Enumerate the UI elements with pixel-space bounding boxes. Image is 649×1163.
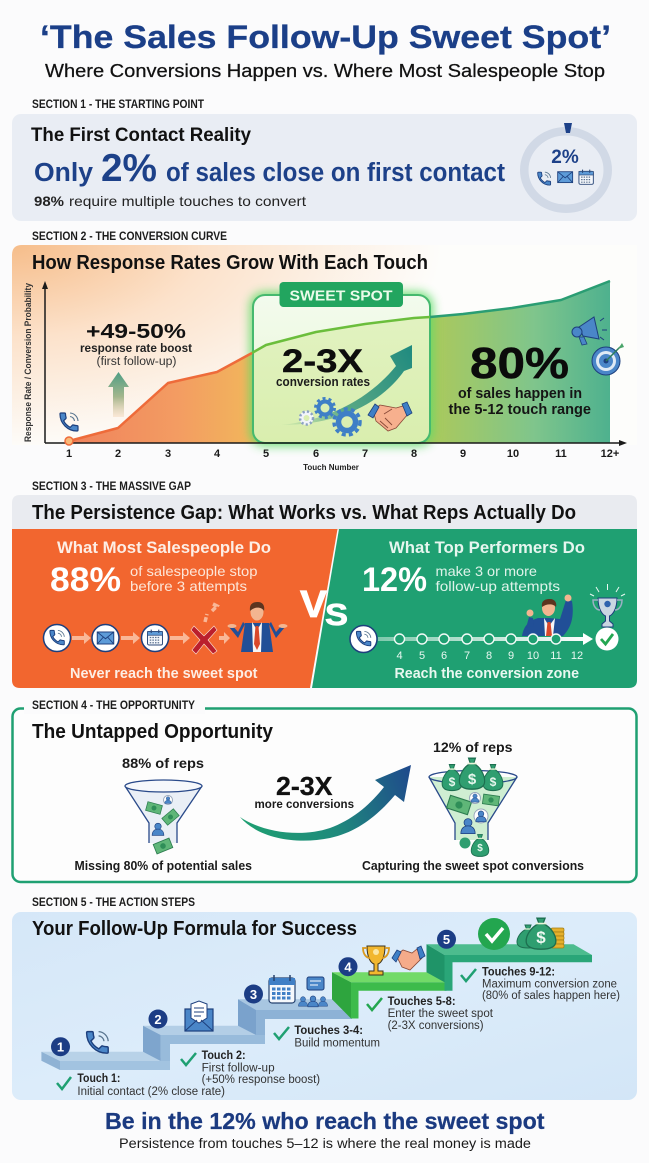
stat: 88 percent: before 3 attempts [130,578,247,594]
x axis title: Touch Number [303,463,359,472]
area chart [69,281,610,443]
callout: first follow-up boost: +49-50% [86,321,186,343]
panel: most salespeople: What Most Salespeople Do [57,539,271,557]
step 2 text: Touch 2: [202,1050,246,1062]
multiplier callout: 2-3X [276,771,333,801]
step 2 text: (+50% response boost) [202,1074,320,1086]
stat: 80 percent [448,339,591,418]
x axis tick labels: 4 [214,448,221,460]
label: 88 percent of reps: 88% of reps [122,755,204,771]
panel heading: The Persistence Gap: What Works vs. What Reps Actually Do [32,502,576,524]
VS badge [300,584,348,632]
icon: calendar [579,170,593,184]
stat: 88 percent: of salespeople stop [130,563,258,579]
panel heading: The First Contact Reality [31,125,251,146]
icon: megaphone [572,317,607,345]
x axis tick labels: 2 [115,448,121,460]
touch timeline: 4 [396,650,403,662]
stat: 80 percent: of sales happen in [458,386,582,402]
panel heading: Your Follow-Up Formula for Success [32,918,357,940]
stat: 12 percent [362,561,560,599]
touch timeline: 6 [441,650,447,662]
touch timeline: 11 [550,650,562,662]
touch timeline: 9 [508,650,514,662]
touch sequence icons [44,604,230,654]
caption: missing: Missing 80% of potential sales [74,859,252,873]
callout: first follow-up boost: (first follow-up) [96,356,177,368]
VS badge: S [325,597,348,632]
icon: money bags and coins [517,918,564,949]
sweet spot stat: conversion rates [276,375,370,389]
step 4 text: (2-3X conversions) [388,1020,484,1032]
icon: phone start [60,413,78,431]
title: ‘The Sales Follow-Up Sweet Spot’ [40,19,611,55]
panel heading: The Untapped Opportunity [32,721,274,743]
stat: 88 percent: 88% [50,561,121,599]
icon: email [185,1001,213,1031]
x axis tick labels: 9 [460,448,466,460]
step 1 text: Initial contact (2% close rate) [77,1086,225,1098]
icon: team chat [298,977,328,1007]
x axis tick labels: 10 [507,448,519,460]
funnel: full [429,758,517,856]
donut: 2 percent [524,123,608,209]
panel: untapped opportunity [12,700,636,882]
step 2 text [181,1050,320,1086]
callout: first follow-up boost [80,321,192,417]
icon: money bags and coins: $ [536,928,546,947]
step 5 text: Maximum conversion zone [482,979,617,991]
icon: success check [478,918,510,950]
sweet spot badge: SWEET SPOT [290,288,392,304]
subtitle: Where Conversions Happen vs. Where Most Salespeople Stop [45,60,605,81]
step 3 text [274,1025,380,1050]
headline statistic: of sales close on first contact [166,159,505,187]
panel: action steps: 5 [443,932,450,947]
touch timeline [350,626,618,662]
panel: top performers [312,529,637,688]
step 5 text: (80% of sales happen here) [482,990,620,1002]
section 2 label: SECTION 2 - THE CONVERSION CURVE [32,231,227,243]
callout: first follow-up boost: response rate boost [80,341,192,355]
icon: phone [87,1032,108,1053]
curve lines [69,281,610,441]
panel: action steps: 4 [344,960,352,974]
icon: money bags: $ [449,775,456,789]
caption: Reach the conversion zone [394,665,579,682]
y axis label: Response Rate / Conversion Probability [23,283,33,442]
panel: action steps: 2 [154,1012,162,1027]
panel: conversion curve [12,245,637,472]
stat: 12 percent: make 3 or more [436,563,537,579]
touch timeline: 8 [486,650,492,662]
headline statistic: Only [34,159,94,187]
donut: 2 percent: 2% [551,147,579,168]
label: 12 percent of reps: 12% of reps [433,739,513,755]
x axis tick labels: 11 [555,448,567,460]
arrow: up [108,372,129,417]
stat: 80 percent: 80% [470,339,569,388]
x axis tick labels: 5 [263,448,269,460]
person: shrugging rep [228,602,288,652]
VS badge: V [300,584,328,626]
panel heading: How Response Rates Grow With Each Touch [32,252,428,274]
step 4 text: Enter the sweet spot [388,1008,494,1020]
stat: 12 percent: follow-up attempts [436,578,560,594]
x axis tick labels: 8 [411,448,417,460]
icon: money bags: $ [468,771,477,788]
axes [42,281,627,446]
touch timeline: 7 [464,650,470,662]
footer headline: Be in the 12% who reach the sweet spot [105,1108,545,1134]
x axis tick labels: 6 [313,448,319,460]
start marker [65,437,73,445]
panel: action steps [12,912,637,1100]
touch timeline: 5 [419,650,425,662]
step 4 text: Touches 5-8: [388,996,456,1008]
section 4 label: SECTION 4 - THE OPPORTUNITY [32,700,195,712]
panel: top performers: What Top Performers Do [389,539,585,557]
x axis tick labels: 12+ [601,448,619,460]
section 1 label: SECTION 1 - THE STARTING POINT [32,99,204,111]
person: celebrating rep [522,594,573,636]
section 5 label: SECTION 5 - THE ACTION STEPS [32,897,195,909]
footer subline: Persistence from touches 5–12 is where the real money is made [119,1136,531,1151]
icon: money bags: $ [490,775,497,789]
step 3 text: Touches 3-4: [294,1025,363,1037]
icon: money bags [442,758,503,791]
x axis tick labels: 1 [66,448,72,460]
icon: trophy [590,584,625,627]
supporting statement: 98% [34,193,65,209]
sweet spot box [250,292,433,446]
x axis tick labels: 3 [165,448,171,460]
touch timeline: 12 [571,650,583,662]
sweet spot badge [280,282,403,307]
headline statistic: 2% [101,147,157,190]
icon: trophy [363,946,389,975]
supporting statement: require multiple touches to convert [69,193,306,209]
icon: phone [538,172,551,185]
step 3 text: Build momentum [294,1038,380,1050]
icon: target [592,343,624,375]
staircase [41,944,592,1070]
panel: most salespeople [12,529,338,688]
step 2 text: First follow-up [202,1063,275,1075]
sweet spot stat [276,343,370,389]
funnel: full: $ [477,843,483,854]
step 1 text [57,1073,225,1098]
step 5 text: Touches 9-12: [482,967,555,979]
step 5 text [461,967,620,1002]
icon: calendar [269,975,295,1003]
icon: gears [300,398,360,435]
multiplier callout: more conversions [254,799,354,811]
x axis tick labels: 7 [362,448,368,460]
sweet spot stat: 2-3X [282,343,364,379]
panel: action steps: 1 [57,1040,64,1054]
stat: 12 percent: 12% [362,561,427,599]
icon: handshake [368,402,412,431]
headline statistic [34,147,505,190]
arrow: growth [281,345,412,425]
section 3 label: SECTION 3 - THE MASSIVE GAP [32,481,191,493]
step 4 text [367,996,494,1032]
step 1 text: Touch 1: [77,1073,120,1085]
touch timeline: 10 [527,650,539,662]
x axis tick labels [66,448,619,460]
multiplier callout [254,771,354,811]
icon: envelope [558,172,573,183]
step number badges [51,930,456,1056]
caption: Never reach the sweet spot [70,665,258,682]
panel: first contact reality [12,114,637,221]
stat: 80 percent: the 5-12 touch range [448,402,591,418]
stat: 88 percent [50,561,258,599]
panel: action steps: 3 [250,987,257,1002]
icon: handshake [392,946,425,970]
arrow: opportunity [240,765,411,841]
funnel: leaky [125,780,202,854]
caption: capturing: Capturing the sweet spot conversions [362,859,584,873]
panel: persistence gap [12,495,637,688]
